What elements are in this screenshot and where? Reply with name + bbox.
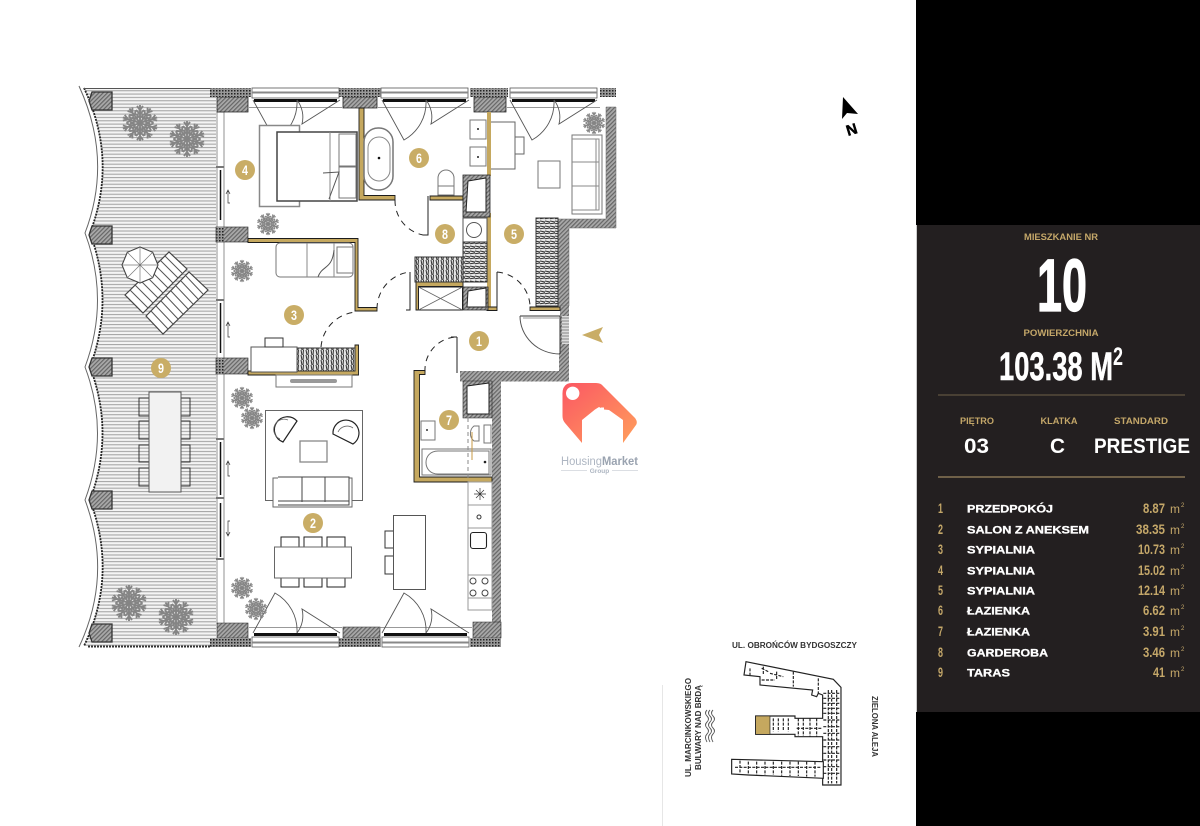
building outline	[732, 662, 841, 785]
dining table	[231, 537, 352, 620]
room number badges: 4	[242, 162, 248, 178]
room area list: 2	[1181, 647, 1185, 653]
room area list: 1	[938, 500, 943, 516]
room area list: ŁAZIENKA	[967, 626, 1030, 638]
gold partition walls	[248, 108, 560, 482]
parasol and sun loungers	[122, 247, 208, 334]
room area list: 6.62	[1143, 602, 1165, 618]
logo: Housing Market Group: HousingMarket	[561, 456, 638, 468]
room area list: 2	[1181, 667, 1185, 673]
street label: right: ZIELONA ALEJA	[870, 696, 879, 757]
entrance door	[520, 316, 560, 354]
room area list: 41	[1153, 664, 1165, 680]
panel: apartment interior	[210, 88, 616, 647]
page background	[0, 0, 916, 826]
room area list: 8	[938, 644, 943, 660]
room area list: 9	[938, 664, 943, 680]
room number badges: 6	[416, 150, 422, 166]
room area list: 3.91	[1143, 623, 1165, 639]
icon: north arrow: N	[844, 120, 860, 140]
bedroom 3 furniture	[231, 243, 353, 372]
details: floor, staircase, standard: PIĘTRO	[960, 416, 994, 427]
living room furniture	[231, 375, 362, 507]
room area list	[938, 500, 1185, 680]
area value: 103.38 M	[999, 345, 1113, 389]
details: floor, staircase, standard: C	[1050, 435, 1065, 458]
room area list: m	[1170, 502, 1180, 516]
room number badges	[151, 148, 524, 533]
bedroom 5 furniture	[491, 112, 605, 214]
divider: key plan	[662, 685, 664, 826]
room area list: 6	[938, 602, 943, 618]
room number badges: 8	[442, 226, 448, 242]
terrace pillars	[89, 92, 112, 642]
icon: north arrow	[842, 97, 860, 140]
terrace plants	[111, 105, 205, 635]
room area list: 3.46	[1143, 644, 1165, 660]
icon: water waves	[706, 710, 714, 742]
glazing and balcony doors	[249, 88, 600, 647]
room area list: 2	[1181, 503, 1185, 509]
room area list: m	[1170, 543, 1180, 557]
room area list: 7	[938, 623, 943, 639]
room area list: 2	[1181, 605, 1185, 611]
facade and window wall	[216, 112, 230, 624]
location key plan	[662, 641, 879, 826]
room area list: 15.02	[1138, 562, 1165, 578]
room number badges: 5	[511, 226, 517, 242]
street label: top: UL. OBROŃCÓW BYDGOSZCZY	[732, 641, 858, 650]
details: floor, staircase, standard: 03	[964, 435, 989, 458]
room area list: m	[1170, 646, 1180, 660]
bedroom 4 furniture	[257, 126, 357, 235]
room area list: 2	[938, 521, 943, 537]
room area list: m	[1170, 604, 1180, 618]
room area list: 2	[1181, 626, 1185, 632]
room area list: 3	[938, 541, 943, 557]
room area list: TARAS	[967, 668, 1010, 680]
service shafts	[418, 175, 492, 418]
bathroom 7 fixtures	[421, 418, 491, 482]
room number badges: 7	[446, 412, 452, 428]
room number badges: 9	[158, 360, 164, 376]
street label: left: BULWARY NAD BRDĄ	[694, 685, 703, 770]
room area list: SALON Z ANEKSEM	[967, 524, 1089, 536]
room area list: 2	[1181, 544, 1185, 550]
label: apartment number: MIESZKANIE NR	[1024, 232, 1098, 243]
thin partitions and door swings	[321, 196, 530, 373]
room area list: PRZEDPOKÓJ	[967, 502, 1053, 516]
room number badges: 3	[291, 307, 297, 323]
room area list: 2	[1181, 585, 1185, 591]
room area list: m	[1170, 666, 1180, 680]
panel: side column	[916, 0, 1200, 826]
room area list: 2	[1181, 565, 1185, 571]
room number badges: 1	[476, 333, 482, 349]
room area list: SYPIALNIA	[967, 544, 1035, 556]
structural walls	[210, 88, 616, 647]
room area list: 38.35	[1136, 521, 1165, 537]
street label: left	[684, 678, 703, 777]
room area list: m	[1170, 584, 1180, 598]
terrace dining table	[139, 392, 190, 492]
arrow: entrance	[582, 327, 603, 343]
panel: terrace	[79, 86, 216, 647]
area value: 2	[1113, 343, 1123, 371]
room number badges: 2	[310, 515, 316, 531]
room area list: 5	[938, 582, 943, 598]
room area list: 12.14	[1138, 582, 1165, 598]
details: floor, staircase, standard	[938, 395, 1190, 477]
room area list: m	[1170, 564, 1180, 578]
details: floor, staircase, standard: KLATKA	[1040, 416, 1078, 427]
room area list: SYPIALNIA	[967, 586, 1035, 598]
logo: Housing Market Group	[561, 383, 638, 475]
street label: left: UL. MARCINKOWSKIEGO	[684, 678, 693, 777]
room area list: 10.73	[1138, 541, 1165, 557]
kitchen units	[468, 482, 492, 610]
room area list: ŁAZIENKA	[967, 606, 1030, 618]
details: floor, staircase, standard: PRESTIGE	[1094, 435, 1190, 458]
room area list: 8.87	[1143, 500, 1165, 516]
details: floor, staircase, standard: STANDARD	[1114, 416, 1168, 427]
bathroom 6 fixtures	[364, 120, 486, 195]
room area list: m	[1170, 625, 1180, 639]
wardrobes	[297, 218, 558, 371]
room area list: GARDEROBA	[967, 648, 1048, 660]
logo: Housing Market Group: Group	[590, 468, 609, 475]
room area list: m	[1170, 523, 1180, 537]
room area list: SYPIALNIA	[967, 566, 1035, 578]
room area list: 2	[1181, 524, 1185, 530]
room area list: 4	[938, 562, 943, 578]
apartment number: 10	[1037, 244, 1087, 327]
kitchen island	[385, 516, 426, 590]
label: area: POWIERZCHNIA	[1024, 328, 1099, 339]
